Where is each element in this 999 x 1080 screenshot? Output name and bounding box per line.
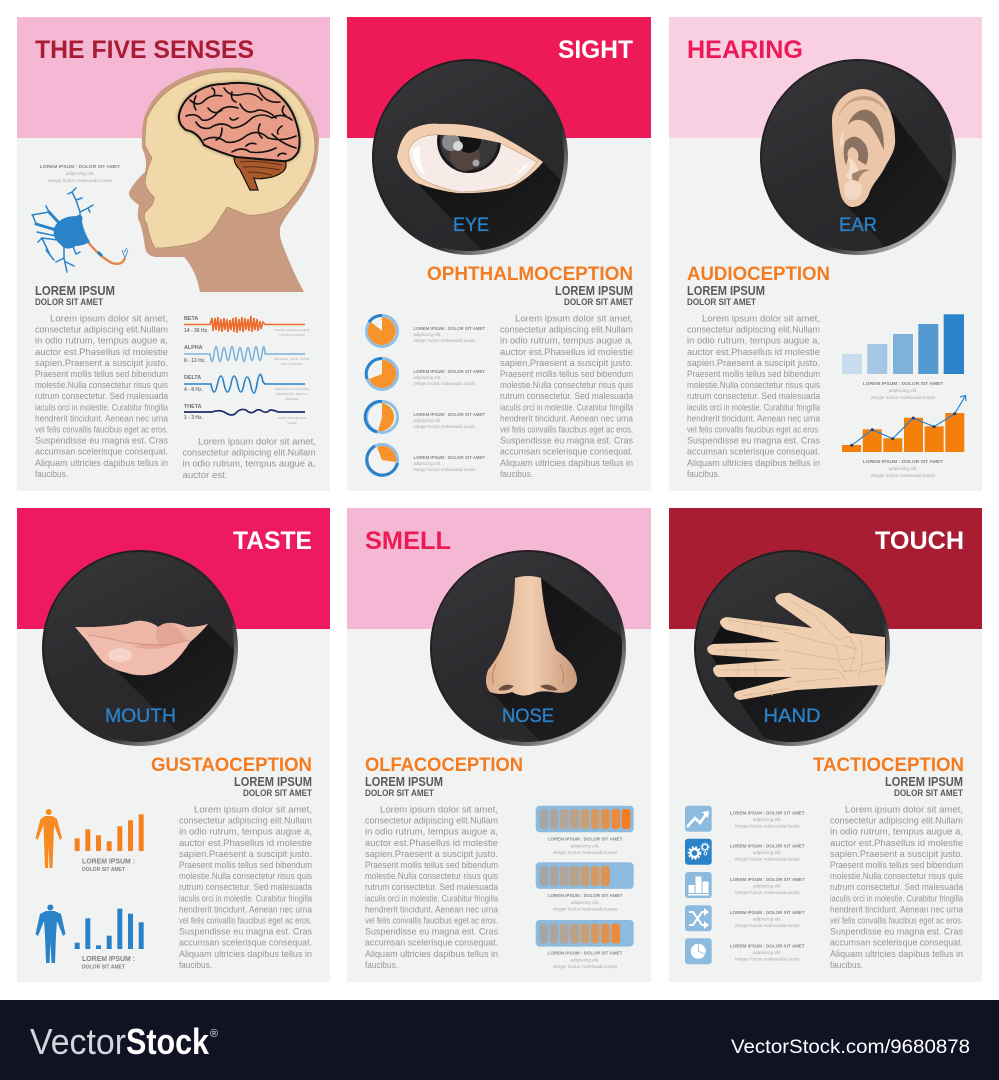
body text: Aliquam ultricies dapibus tellus in [35, 458, 168, 469]
meter 3: adipiscing elit. [571, 958, 599, 962]
body text: rutrum consectetur. Sed malesuada [35, 391, 169, 402]
body text: sapien.Praesent a suscipit justo. [830, 849, 963, 860]
item: gears: adipiscing elit. [753, 850, 782, 855]
subheading: DOLOR SIT AMET [243, 788, 312, 799]
pie 2: LOREM IPSUM : DOLOR SIT AMET [414, 369, 485, 374]
pie 4 [366, 444, 485, 476]
body text: Suspendisse eu magna est. Cras [687, 436, 820, 447]
item: gears: LOREM IPSUM : DOLOR SIT AMET [730, 844, 805, 849]
body text: faucibus. [830, 960, 863, 971]
wave: alpha: 8 - 13 Hz. [184, 358, 206, 364]
body text: in odio rutrum, tempus augue a, [179, 827, 312, 838]
meter 3 [536, 920, 634, 969]
caption: neuron: LOREM IPSUM : DOLOR SIT AMET [40, 164, 120, 170]
pie 3: adipiscing elit. [414, 418, 441, 423]
meter 2: LOREM IPSUM : DOLOR SIT AMET [548, 893, 623, 898]
heading: gustaoception: GUSTAOCEPTION [151, 754, 312, 776]
item: growth: LOREM IPSUM : DOLOR SIT AMET [730, 810, 805, 816]
wave: theta: 1 - 3 Hz. [184, 415, 204, 421]
wave: beta: 14 - 30 Hz. [184, 328, 209, 334]
item: growth [685, 806, 805, 832]
body text: molestie.Nulla consectetur risus quis [830, 871, 963, 882]
meter 2: integer luctus malesuada tuepis [553, 906, 618, 912]
pie 1: LOREM IPSUM : DOLOR SIT AMET [414, 326, 485, 331]
caption: orange chart: LOREM IPSUM : DOLOR SIT AMET [863, 459, 943, 465]
body text: iaculis orci in molestie. Curabitur fringilla [830, 893, 964, 904]
heading: ophthalmoception: OPHTHALMOCEPTION [427, 263, 633, 285]
body text: rutrum consectetur. Sed malesuada [179, 882, 313, 893]
body text: accumsan scelerisque consequat. [500, 447, 633, 458]
heading: touch: TOUCH [875, 527, 964, 555]
subheading: LOREM IPSUM [555, 284, 633, 298]
body text: Suspendisse eu magna est. Cras [179, 927, 312, 938]
body text: faucibus. [500, 469, 533, 480]
meter 1 [536, 806, 634, 855]
subheading: DOLOR SIT AMET [687, 297, 756, 308]
pie 2: adipiscing elit. [414, 375, 441, 380]
body text [365, 804, 499, 971]
body text: short paragraph: auctor est. [182, 470, 228, 481]
body text: consectetur adipiscing elit.Nullam [35, 325, 168, 336]
subheading: LOREM IPSUM [687, 284, 765, 298]
logo: VectorStock: Vector [30, 1021, 126, 1062]
image id: VectorStock.com/9680878 [731, 1037, 970, 1058]
body text: Lorem ipsum dolor sit amet, [515, 314, 633, 324]
body text: Suspendisse eu magna est. Cras [500, 436, 633, 447]
wave: delta: DELTA [184, 375, 201, 381]
body text: rutrum consectetur. Sed malesuada [500, 391, 634, 402]
panel: touch [669, 508, 982, 982]
body text: auctor est.Phasellus id molestie [687, 347, 820, 358]
body text: vel felis convallis faucibus eget ac eros. [830, 916, 963, 926]
icon: ear in circle [760, 59, 956, 255]
body text: hendrerit tincidunt. Aenean nec urna [687, 413, 821, 424]
subheading [234, 775, 312, 799]
caption: neuron: adipiscing elit. [66, 171, 94, 176]
wave: alpha [184, 345, 310, 366]
item: gears: integer luctus malesuada tuepis [735, 857, 800, 862]
body text: Lorem ipsum dolor sit amet, [194, 804, 312, 816]
panel: the five senses [17, 17, 330, 491]
body text: faucibus. [687, 469, 720, 480]
label: mouth: MOUTH [105, 706, 176, 727]
body text: molestie.Nulla consectetur risus quis [500, 380, 633, 391]
body text: accumsan scelerisque consequat. [687, 447, 820, 458]
caption: blue chart: LOREM IPSUM : DOLOR SIT AMET [863, 381, 943, 387]
body text: auctor est.Phasellus id molestie [830, 838, 963, 849]
brain [179, 83, 300, 190]
body text: Praesent mollis tellus sed bibendum [179, 860, 312, 871]
figure: blue body with bars [36, 904, 144, 970]
body text: Praesent mollis tellus sed bibendum [687, 369, 820, 380]
body text: Praesent mollis tellus sed bibendum [35, 369, 168, 380]
footer: watermark bar [0, 1000, 999, 1080]
caption: orange chart: integer luctus malesuada tuepis [871, 473, 936, 478]
body text [35, 314, 169, 480]
icon: nose in circle [430, 550, 626, 746]
body text: Suspendisse eu magna est. Cras [830, 927, 963, 938]
subheading: LOREM IPSUM [234, 775, 312, 789]
panel: hearing [669, 17, 990, 491]
subheading: DOLOR SIT AMET [564, 297, 633, 308]
label: ear: EAR [839, 215, 877, 236]
body text: vel felis convallis faucibus eget ac eros. [500, 424, 633, 436]
subheading [885, 775, 963, 799]
wave: alpha: RELAXED, CALM, LUCID, [274, 357, 310, 361]
heading: hearing: HEARING [687, 36, 803, 64]
body text: hendrerit tincidunt. Aenean nec urna [365, 904, 499, 915]
body text: in odio rutrum, tempus augue a, [35, 336, 168, 347]
heading: smell: SMELL [365, 527, 451, 555]
body text: hendrerit tincidunt. Aenean nec urna [500, 413, 634, 424]
item: growth: integer luctus malesuada tuepis [735, 824, 800, 828]
item: pie: integer luctus malesuada tuepis [735, 956, 800, 961]
item: bars: adipiscing elit. [753, 884, 782, 888]
caption: DOLOR SIT AMET [82, 867, 126, 873]
body text: molestie.Nulla consectetur risus quis [35, 380, 168, 391]
caption [82, 856, 135, 873]
body text: short paragraph: in odio rutrum, tempus augue a, [182, 459, 316, 470]
item: gears [685, 839, 805, 865]
figure: orange body with bars [36, 809, 144, 873]
pie 4: adipiscing elit. [414, 461, 441, 466]
body text: vel felis convallis faucibus eget ac eros. [35, 424, 168, 436]
logo: VectorStock [30, 1021, 218, 1062]
caption: DOLOR SIT AMET [82, 964, 126, 970]
icon: hand in circle [694, 550, 890, 746]
subheading [687, 284, 765, 308]
caption: neuron [40, 164, 120, 183]
body text: short paragraph: Lorem ipsum dolor sit amet, [198, 436, 316, 448]
body text: consectetur adipiscing elit.Nullam [830, 816, 963, 827]
heading: sight: SIGHT [558, 36, 633, 64]
body text: consectetur adipiscing elit.Nullam [179, 816, 312, 827]
body text: faucibus. [35, 469, 68, 480]
subheading: LOREM IPSUM [35, 284, 115, 298]
wave: delta: MEDITATION, MENTAL [276, 392, 308, 396]
subheading: LOREM IPSUM [365, 775, 443, 789]
pie 4: LOREM IPSUM : DOLOR SIT AMET [414, 455, 485, 460]
body text: molestie.Nulla consectetur risus quis [179, 871, 312, 882]
body text: iaculis orci in molestie. Curabitur fringilla [687, 402, 821, 413]
body text: Suspendisse eu magna est. Cras [365, 927, 498, 938]
body text: auctor est.Phasellus id molestie [500, 347, 633, 358]
icon: mouth in circle [42, 550, 238, 746]
pie 1: integer luctus malesuada tuepis [414, 338, 476, 343]
body text: sapien.Praesent a suscipit justo. [35, 358, 168, 369]
body text: accumsan scelerisque consequat. [830, 938, 963, 949]
caption: LOREM IPSUM : [82, 856, 135, 866]
body text: auctor est.Phasellus id molestie [179, 838, 312, 849]
label: eye: EYE [453, 215, 489, 236]
body text: sapien.Praesent a suscipit justo. [365, 849, 498, 860]
body text [687, 314, 821, 480]
body text: Lorem ipsum dolor sit amet, [702, 314, 820, 324]
heading: the five senses: THE FIVE SENSES [35, 36, 254, 64]
body text: accumsan scelerisque consequat. [35, 447, 168, 458]
body text: rutrum consectetur. Sed malesuada [687, 391, 821, 402]
body text: Praesent mollis tellus sed bibendum [500, 369, 633, 380]
body text: Aliquam ultricies dapibus tellus in [179, 949, 312, 960]
subheading: DOLOR SIT AMET [365, 788, 434, 799]
body text: vel felis convallis faucibus eget ac eros. [365, 916, 498, 926]
body text: molestie.Nulla consectetur risus quis [365, 871, 498, 882]
subheading [365, 775, 443, 799]
wave: delta: DEEP RELAXATION AND [275, 387, 310, 391]
caption: neuron: integer luctus malesuada tuepis [48, 178, 113, 183]
meter 2 [536, 862, 634, 912]
caption: LOREM IPSUM : [82, 954, 135, 963]
body text: molestie.Nulla consectetur risus quis [687, 380, 820, 391]
meter 3: LOREM IPSUM : DOLOR SIT AMET [548, 950, 623, 956]
wave: beta: CONSCIOUSNESS [279, 333, 305, 337]
subheading: DOLOR SIT AMET [35, 297, 103, 308]
pie 2 [366, 358, 485, 390]
body text: Suspendisse eu magna est. Cras [35, 436, 168, 447]
body text [830, 804, 964, 971]
item: pie: LOREM IPSUM : DOLOR SIT AMET [730, 943, 805, 948]
body text: hendrerit tincidunt. Aenean nec urna [35, 413, 169, 424]
wave: delta: IMAGERY [285, 397, 299, 401]
label: nose: NOSE [502, 706, 554, 727]
body text: vel felis convallis faucibus eget ac eros. [179, 916, 312, 926]
item: shuffle: integer luctus malesuada tuepis [735, 923, 800, 928]
wave: theta: DEEP, DREAMLESS [278, 416, 306, 420]
panel: sight [347, 17, 651, 491]
body text: auctor est.Phasellus id molestie [365, 838, 498, 849]
item: shuffle: adipiscing elit. [753, 917, 782, 922]
item: bars: integer luctus malesuada tuepis [735, 890, 800, 895]
panel: smell [347, 508, 680, 982]
icon: eye in circle [372, 59, 568, 255]
item: bars: LOREM IPSUM : DOLOR SIT AMET [730, 877, 805, 882]
body text: sapien.Praesent a suscipit justo. [500, 358, 633, 369]
wave: alpha: NOT THINKING [281, 362, 303, 366]
body text: Lorem ipsum dolor sit amet, [50, 314, 168, 324]
meter 1: integer luctus malesuada tuepis [553, 850, 618, 855]
body text: in odio rutrum, tempus augue a, [365, 827, 498, 838]
pie 3: integer luctus malesuada tuepis [414, 424, 476, 429]
caption: blue chart: integer luctus malesuada tuepis [871, 395, 936, 400]
body text: hendrerit tincidunt. Aenean nec urna [830, 904, 964, 915]
pie 3: LOREM IPSUM : DOLOR SIT AMET [414, 412, 485, 417]
body text: sapien.Praesent a suscipit justo. [179, 849, 312, 860]
body text: Aliquam ultricies dapibus tellus in [830, 949, 963, 960]
wave: theta: THETA [184, 404, 202, 410]
body text: Aliquam ultricies dapibus tellus in [687, 458, 820, 469]
body text [500, 314, 634, 480]
body text: Praesent mollis tellus sed bibendum [365, 860, 498, 871]
caption [82, 954, 135, 970]
bar chart: blue [842, 314, 964, 400]
body text: Lorem ipsum dolor sit amet, [845, 804, 963, 816]
body text: faucibus. [179, 960, 212, 971]
body text: iaculis orci in molestie. Curabitur fringilla [365, 893, 499, 904]
body text: vel felis convallis faucibus eget ac eros. [687, 424, 820, 436]
heading: tactioception: TACTIOCEPTION [813, 754, 964, 776]
body text: rutrum consectetur. Sed malesuada [365, 882, 499, 893]
pie 3 [365, 401, 485, 432]
logo: VectorStock: ® [210, 1028, 218, 1040]
heading: audioception: AUDIOCEPTION [687, 263, 830, 285]
chart: brain waves [184, 316, 310, 425]
heading: taste: TASTE [233, 527, 312, 555]
subheading [555, 284, 633, 308]
subheading: LOREM IPSUM [885, 775, 963, 789]
body text: consectetur adipiscing elit.Nullam [687, 325, 820, 336]
wave: theta [184, 404, 306, 425]
item: shuffle: LOREM IPSUM : DOLOR SIT AMET [730, 910, 805, 915]
pie 1: adipiscing elit. [414, 332, 441, 337]
icon: neuron [32, 188, 128, 272]
icon list [685, 806, 805, 964]
body text: Aliquam ultricies dapibus tellus in [500, 458, 633, 469]
subheading [35, 284, 115, 308]
pie charts [365, 315, 485, 476]
body text: consectetur adipiscing elit.Nullam [365, 816, 498, 827]
item: pie [685, 938, 805, 964]
item: pie: adipiscing elit. [753, 950, 782, 955]
body text: iaculis orci in molestie. Curabitur fringilla [179, 893, 313, 904]
body text: rutrum consectetur. Sed malesuada [830, 882, 964, 893]
meter 1: LOREM IPSUM : DOLOR SIT AMET [548, 836, 623, 842]
wave: delta: 4 - 8 Hz. [184, 387, 204, 393]
wave: beta: AWAKE, NORMAL ALERT [274, 328, 310, 332]
body text: sapien.Praesent a suscipit justo. [687, 358, 820, 369]
heading: olfacoception: OLFACOCEPTION [365, 754, 523, 776]
body text: Lorem ipsum dolor sit amet, [380, 804, 498, 816]
wave: delta [184, 374, 310, 401]
combo chart: orange bars and trend arrow [842, 396, 966, 478]
caption: orange chart [863, 459, 943, 478]
pie 1 [366, 315, 485, 346]
body text: in odio rutrum, tempus augue a, [830, 827, 963, 838]
caption: blue chart [863, 381, 943, 400]
body text: faucibus. [365, 960, 398, 971]
logo: VectorStock: Stock [126, 1021, 210, 1062]
body text: in odio rutrum, tempus augue a, [500, 336, 633, 347]
body text: short paragraph [182, 436, 316, 481]
wave: theta: SLEEP [287, 421, 297, 425]
body text: auctor est.Phasellus id molestie [35, 347, 168, 358]
meter 1: adipiscing elit. [571, 844, 599, 848]
item: growth: adipiscing elit. [753, 817, 782, 822]
pie 4: integer luctus malesuada tuepis [414, 467, 476, 472]
body text: accumsan scelerisque consequat. [365, 938, 498, 949]
body text: short paragraph: consectetur adipiscing elit.Nullam [182, 448, 316, 459]
item: bars [685, 872, 805, 898]
meter 2: adipiscing elit. [571, 900, 599, 905]
wave: beta: BETA [184, 316, 198, 322]
subheading: DOLOR SIT AMET [894, 788, 963, 799]
body text: Aliquam ultricies dapibus tellus in [365, 949, 498, 960]
head illustration [129, 68, 319, 292]
body text: iaculis orci in molestie. Curabitur fringilla [35, 402, 169, 413]
body text [179, 804, 313, 971]
wave: beta [184, 316, 310, 337]
body text: Praesent mollis tellus sed bibendum [830, 860, 963, 871]
caption: orange chart: adipiscing elit. [889, 466, 917, 471]
meter 3: integer luctus malesuada tuepis [553, 964, 618, 969]
body text: accumsan scelerisque consequat. [179, 938, 312, 949]
body text: iaculis orci in molestie. Curabitur fringilla [500, 402, 634, 413]
body text: hendrerit tincidunt. Aenean nec urna [179, 904, 313, 915]
body text: consectetur adipiscing elit.Nullam [500, 325, 633, 336]
pie 2: integer luctus malesuada tuepis [414, 381, 476, 386]
label: hand: HAND [764, 706, 820, 727]
body text: in odio rutrum, tempus augue a, [687, 336, 820, 347]
panel: taste [17, 508, 330, 982]
wave: alpha: ALPHA [184, 345, 203, 351]
item: shuffle [685, 905, 805, 931]
caption: blue chart: adipiscing elit. [889, 388, 917, 393]
